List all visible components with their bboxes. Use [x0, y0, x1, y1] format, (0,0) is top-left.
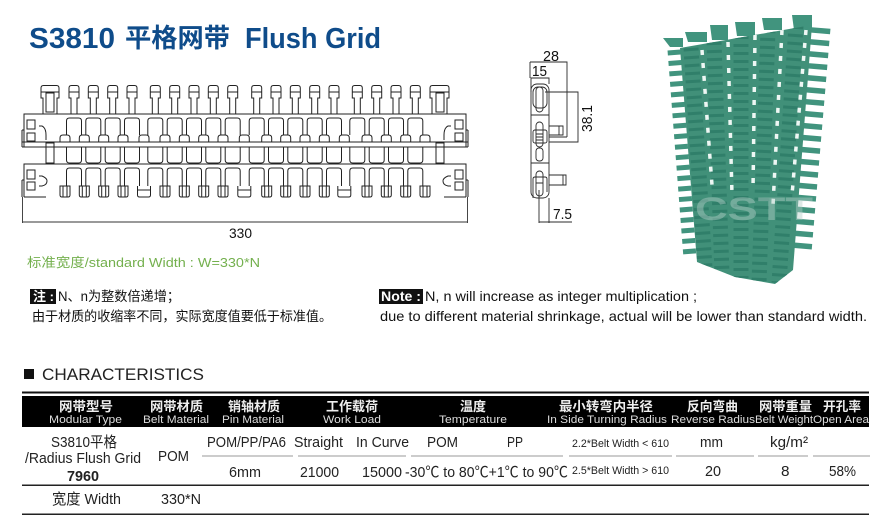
table rows — [25, 434, 856, 508]
table rows: -30℃ to 80℃+1℃ to 90℃ — [405, 464, 568, 481]
Chinese note: 由于材质的收缩率不同，实际宽度值要低于标准值。 — [32, 308, 332, 324]
table rows: PP — [507, 434, 523, 451]
table rows: mm — [700, 434, 723, 451]
table header: Belt Weight — [755, 414, 813, 426]
table header: 工作载荷 — [326, 399, 378, 414]
table header: 网带型号 — [59, 399, 113, 414]
table rows: 宽度 Width — [52, 491, 121, 508]
English note — [379, 288, 867, 324]
table rows: /Radius Flush Grid — [25, 450, 141, 467]
table header: 网带重量 — [759, 399, 812, 414]
Chinese note — [30, 289, 332, 324]
table header: 最小转弯内半径 — [559, 399, 653, 414]
table rows: 8 — [781, 463, 790, 480]
title: S3810 — [29, 23, 115, 55]
product photo: green modular belt: CSTT — [695, 191, 814, 227]
table rows: S3810平格 — [51, 434, 117, 451]
table rows: kg/m² — [770, 434, 808, 451]
table rows: 20 — [705, 463, 721, 480]
table rows: 2.2*Belt Width < 610 — [572, 438, 669, 450]
table header: Open Area — [813, 414, 870, 426]
side-view technical drawing with dimensions: 38.1 — [579, 105, 596, 132]
table rows: 330*N — [161, 491, 201, 508]
English note: due to different material shrinkage, actual will be lower than standard width. — [380, 308, 867, 324]
table header — [22, 396, 870, 427]
table rows: 58% — [829, 463, 856, 480]
product photo: green modular belt — [663, 15, 821, 284]
table header: Work Load — [323, 414, 381, 426]
standard width caption: 标准宽度/standard Width : W=330*N — [27, 255, 260, 270]
title: Flush Grid — [245, 23, 381, 55]
characteristics heading: CHARACTERISTICS — [42, 365, 204, 384]
table rows: In Curve — [356, 434, 409, 451]
English note: Note : — [381, 288, 421, 304]
table header: Belt Material — [143, 414, 209, 426]
title — [29, 23, 381, 55]
table header: Reverse Radius — [671, 414, 756, 426]
side-view technical drawing with dimensions: 28 — [543, 48, 559, 65]
table rows: 21000 — [300, 464, 339, 481]
table header: In Side Turning Radius — [547, 414, 668, 426]
table header: 开孔率 — [823, 399, 861, 414]
belt front-view technical drawing — [22, 86, 468, 197]
table header: Pin Material — [222, 414, 284, 426]
table header: 反向弯曲 — [687, 399, 738, 414]
table rows: POM/PP/PA6 — [207, 434, 286, 451]
side-view technical drawing with dimensions — [530, 48, 596, 223]
title: 平格网带 — [125, 23, 230, 53]
table rows: POM — [158, 448, 189, 465]
table header: Temperature — [439, 414, 507, 426]
table rows: 6mm — [229, 464, 261, 481]
dimension: belt width 330 — [22, 197, 468, 241]
table rows: 15000 — [362, 464, 402, 481]
table rows: 7960 — [67, 468, 99, 485]
dimension: belt width 330: 330 — [229, 225, 252, 241]
table header: 温度 — [460, 399, 486, 414]
table header: 网带材质 — [150, 399, 203, 414]
table header: Modular Type — [49, 414, 122, 426]
Chinese note: N、n为整数倍递增； — [58, 289, 180, 305]
characteristics table — [22, 392, 870, 515]
side-view technical drawing with dimensions: 15 — [532, 63, 547, 80]
table rows: POM — [427, 434, 458, 451]
English note: N, n will increase as integer multiplication ; — [425, 288, 697, 304]
table rows: 2.5*Belt Width > 610 — [572, 465, 669, 477]
side-view technical drawing with dimensions: 7.5 — [553, 206, 572, 223]
Chinese note: 注 : — [33, 289, 54, 304]
table rows: Straight — [294, 434, 344, 451]
table header: 销轴材质 — [228, 399, 280, 414]
